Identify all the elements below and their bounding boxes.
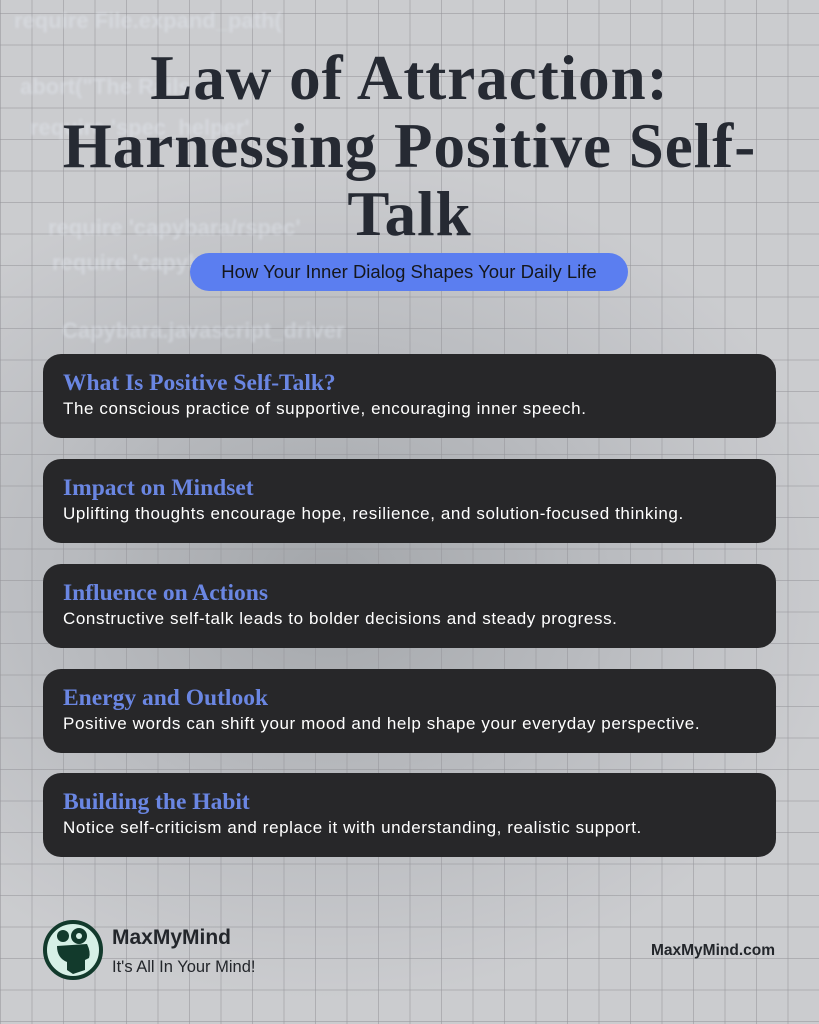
card: energy and outlook: Positive words can shift your mood and help shape your everyday perspective. (63, 714, 700, 733)
title: Talk (347, 179, 472, 249)
card: influence on actions (43, 564, 776, 648)
card: what is positive self-talk: The conscious practice of supportive, encouraging inner speech. (63, 399, 587, 418)
card: building the habit (43, 773, 776, 857)
tagline: It's All In Your Mind! (112, 958, 255, 976)
text: abort("The Rails (20, 74, 191, 99)
card: impact on mindset: Impact on Mindset (63, 475, 254, 501)
text: require File.expand_path( (14, 8, 282, 33)
logo icon (43, 920, 103, 980)
text: require 'capybara/rspec' (48, 215, 301, 240)
card: building the habit: Notice self-criticism and replace it with understanding, realistic support. (63, 818, 642, 837)
website: MaxMyMind.com (651, 942, 775, 959)
card: impact on mindset: Uplifting thoughts encourage hope, resilience, and solution-focused thinking. (63, 504, 684, 523)
card: what is positive self-talk (43, 354, 776, 438)
brand name: MaxMyMind (112, 926, 231, 949)
card: building the habit: Building the Habit (63, 789, 250, 815)
card: impact on mindset (43, 459, 776, 543)
card: energy and outlook: Energy and Outlook (63, 685, 268, 711)
text: require 'spec_helper' (30, 115, 250, 140)
subtitle pill (190, 253, 628, 291)
title: Harnessing Positive Self- (63, 111, 756, 181)
card: influence on actions: Constructive self-talk leads to bolder decisions and steady progress. (63, 609, 618, 628)
card: energy and outlook (43, 669, 776, 753)
title: Law of Attraction: (150, 43, 669, 113)
subtitle pill: How Your Inner Dialog Shapes Your Daily Life (221, 261, 597, 282)
card: what is positive self-talk: What Is Positive Self-Talk? (63, 370, 336, 396)
text: Capybara.javascript_driver (62, 318, 344, 343)
title (63, 43, 756, 249)
text: require 'capybara (52, 250, 235, 275)
card: influence on actions: Influence on Actions (63, 580, 268, 606)
